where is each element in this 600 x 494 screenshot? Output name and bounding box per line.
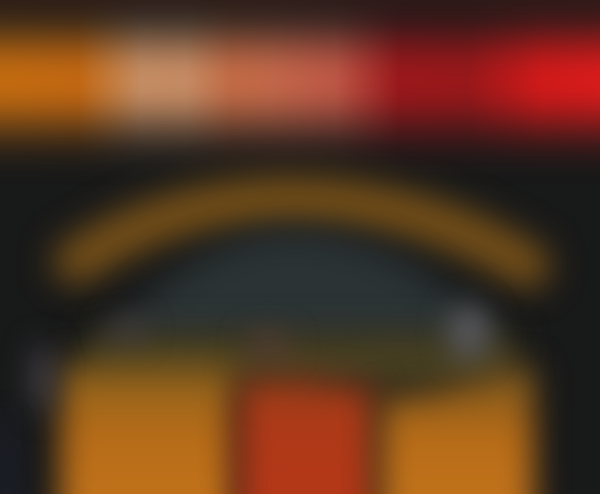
header top edge tint xyxy=(0,0,600,24)
arch banner xyxy=(76,199,528,266)
centre faint blob xyxy=(246,335,290,355)
lower left dark blue edge xyxy=(0,390,14,494)
middle column xyxy=(238,374,374,494)
upper left faint blob xyxy=(108,320,144,340)
olive transition strip xyxy=(85,335,515,385)
dome panel xyxy=(100,232,500,350)
left grey blob xyxy=(33,342,51,414)
header band xyxy=(0,37,600,125)
right column xyxy=(380,366,534,494)
left column xyxy=(60,364,234,494)
right grey blob xyxy=(449,304,489,360)
